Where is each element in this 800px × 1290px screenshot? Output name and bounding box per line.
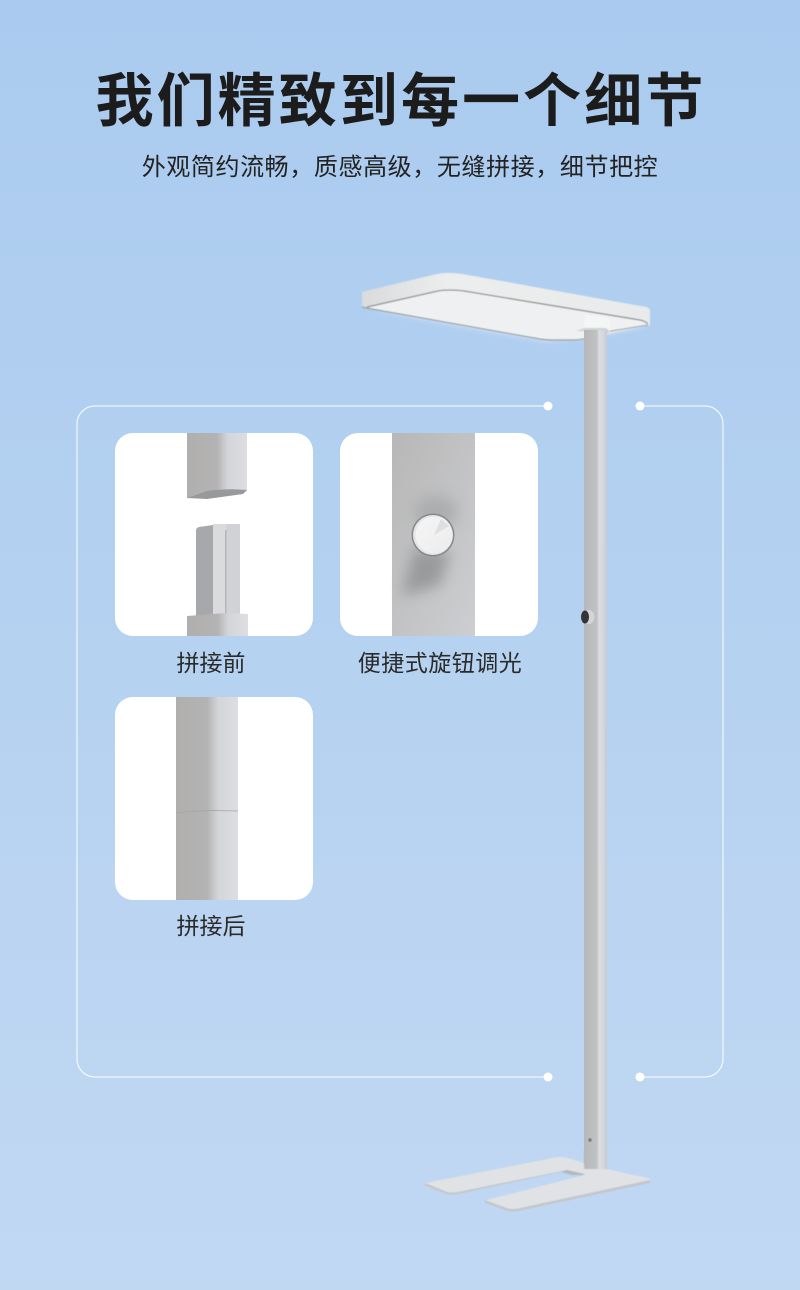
floor lamp product xyxy=(362,273,650,1212)
connector insert xyxy=(196,524,240,616)
lower tube xyxy=(187,613,248,636)
caption: before joining: 拼接前 xyxy=(176,650,246,676)
knob xyxy=(412,514,454,556)
lamp knob xyxy=(581,610,594,624)
card: after joining xyxy=(115,697,313,900)
card: dimmer knob xyxy=(340,433,538,636)
card: before joining xyxy=(115,433,313,636)
lamp head xyxy=(362,273,650,341)
detail frame outline with dots xyxy=(77,402,723,1082)
caption: dimmer knob: 便捷式旋钮调光 xyxy=(358,650,522,676)
lamp pole xyxy=(584,330,607,1170)
caption: after joining: 拼接后 xyxy=(176,913,246,939)
upper tube xyxy=(187,433,247,499)
title: 我们精致到每一个细节 xyxy=(95,69,707,134)
subtitle: 外观简约流畅，质感高级，无缝拼接，细节把控 xyxy=(142,154,658,181)
lamp base xyxy=(425,1138,650,1212)
